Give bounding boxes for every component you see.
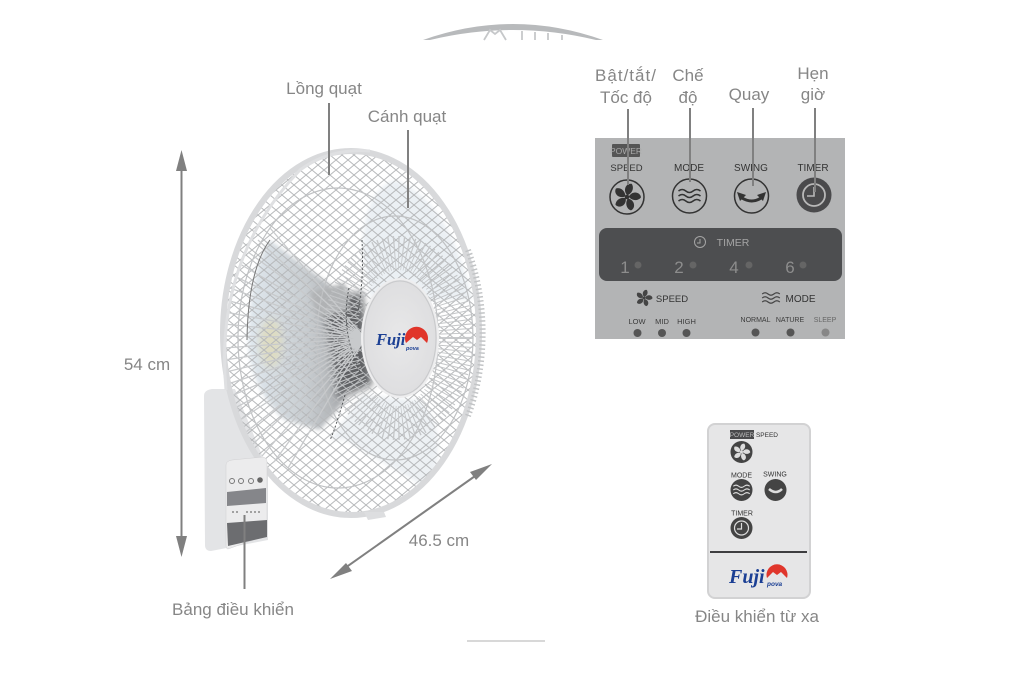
- label: Cánh quạt: Cánh quạt: [368, 107, 447, 126]
- power speed button: POWER: [610, 146, 642, 156]
- label: Lồng quạt: [286, 79, 362, 175]
- label: Quay: Quay: [729, 85, 770, 104]
- remote logo: Fuji: [728, 566, 765, 588]
- panel: control panel close-up: [595, 138, 845, 339]
- timer display: 6: [785, 258, 795, 277]
- swing button: [763, 472, 787, 501]
- bottom rim fragment: [467, 640, 545, 642]
- label: Chế độ: [672, 66, 704, 182]
- remote control: [708, 424, 810, 598]
- remote logo: [728, 564, 787, 588]
- label: Hẹn giờ: [797, 64, 829, 192]
- timer display: 2: [674, 258, 684, 277]
- power speed button: [730, 430, 778, 463]
- height arrow: 54 cm: 54 cm: [124, 355, 170, 374]
- mode indicators: NATURE: [776, 317, 804, 324]
- power speed button: [610, 144, 644, 214]
- outer rim: [223, 151, 479, 515]
- timer button: [730, 510, 753, 539]
- label: Cánh quạt: [368, 107, 447, 208]
- top fan rim fragment: [423, 24, 603, 40]
- fan blades: [248, 180, 472, 490]
- width arrow: 46.5 cm: [330, 464, 492, 579]
- swing button: SWING: [763, 472, 787, 478]
- power speed button: SPEED: [610, 163, 643, 174]
- mode indicators: MODE: [786, 294, 816, 305]
- wire mesh guard: [223, 152, 479, 514]
- label: Bật/tắt/Tốc độ: Bật/tắt/: [595, 66, 656, 85]
- label: Chế độ: Chế: [672, 66, 704, 85]
- mode indicators: NORMAL: [741, 317, 771, 324]
- mode button: MODE: [674, 163, 704, 174]
- fan hub with logo: pova: [405, 346, 419, 352]
- timer button: TIMER: [731, 510, 753, 518]
- swing button: SWING: [734, 163, 768, 174]
- speed indicators: SPEED: [656, 294, 688, 305]
- remote logo: pova: [766, 581, 783, 588]
- mode indicators: [741, 293, 837, 336]
- timer display: 4: [729, 258, 739, 277]
- power speed button: SPEED: [756, 432, 778, 439]
- control panel on mount: [226, 457, 267, 549]
- label: Bật/tắt/Tốc độ: Tốc độ: [600, 88, 652, 107]
- radial spokes: [224, 228, 365, 468]
- height arrow: 54 cm: [124, 150, 187, 557]
- timer display: 1: [620, 258, 630, 277]
- wall fan product photo: [204, 151, 483, 551]
- power speed button: POWER: [730, 432, 755, 439]
- timer display: TIMER: [717, 237, 750, 249]
- mode button: [730, 472, 752, 501]
- label: Bật/tắt/Tốc độ: [595, 66, 656, 185]
- label: Hẹn giờ: giờ: [801, 85, 825, 104]
- mode indicators: SLEEP: [814, 317, 837, 324]
- timer button: TIMER: [797, 163, 829, 174]
- label: Chế độ: độ: [679, 88, 697, 107]
- fan hub with logo: Fuji: [375, 330, 406, 349]
- label: Bảng điều khiển: Bảng điều khiển: [172, 600, 294, 619]
- speed indicators: MID: [655, 317, 669, 326]
- width arrow: 46.5 cm: 46.5 cm: [409, 531, 469, 550]
- speed indicators: [628, 289, 696, 337]
- mode button: MODE: [731, 472, 752, 480]
- mode button: [672, 163, 706, 213]
- label: Quay: [729, 85, 770, 186]
- timer display: [599, 228, 842, 281]
- label: Bảng điều khiển: [172, 515, 294, 619]
- timer button: [796, 163, 832, 212]
- fan hub with logo: [362, 279, 438, 397]
- wall mount body: [204, 389, 268, 551]
- label: Lồng quạt: Lồng quạt: [286, 79, 362, 98]
- speed indicators: LOW: [628, 317, 646, 326]
- speed indicators: HIGH: [677, 317, 696, 326]
- label: Hẹn giờ: Hẹn: [797, 64, 829, 83]
- label: Điều khiển từ xa: Điều khiển từ xa: [695, 607, 819, 626]
- swing button: [734, 163, 768, 213]
